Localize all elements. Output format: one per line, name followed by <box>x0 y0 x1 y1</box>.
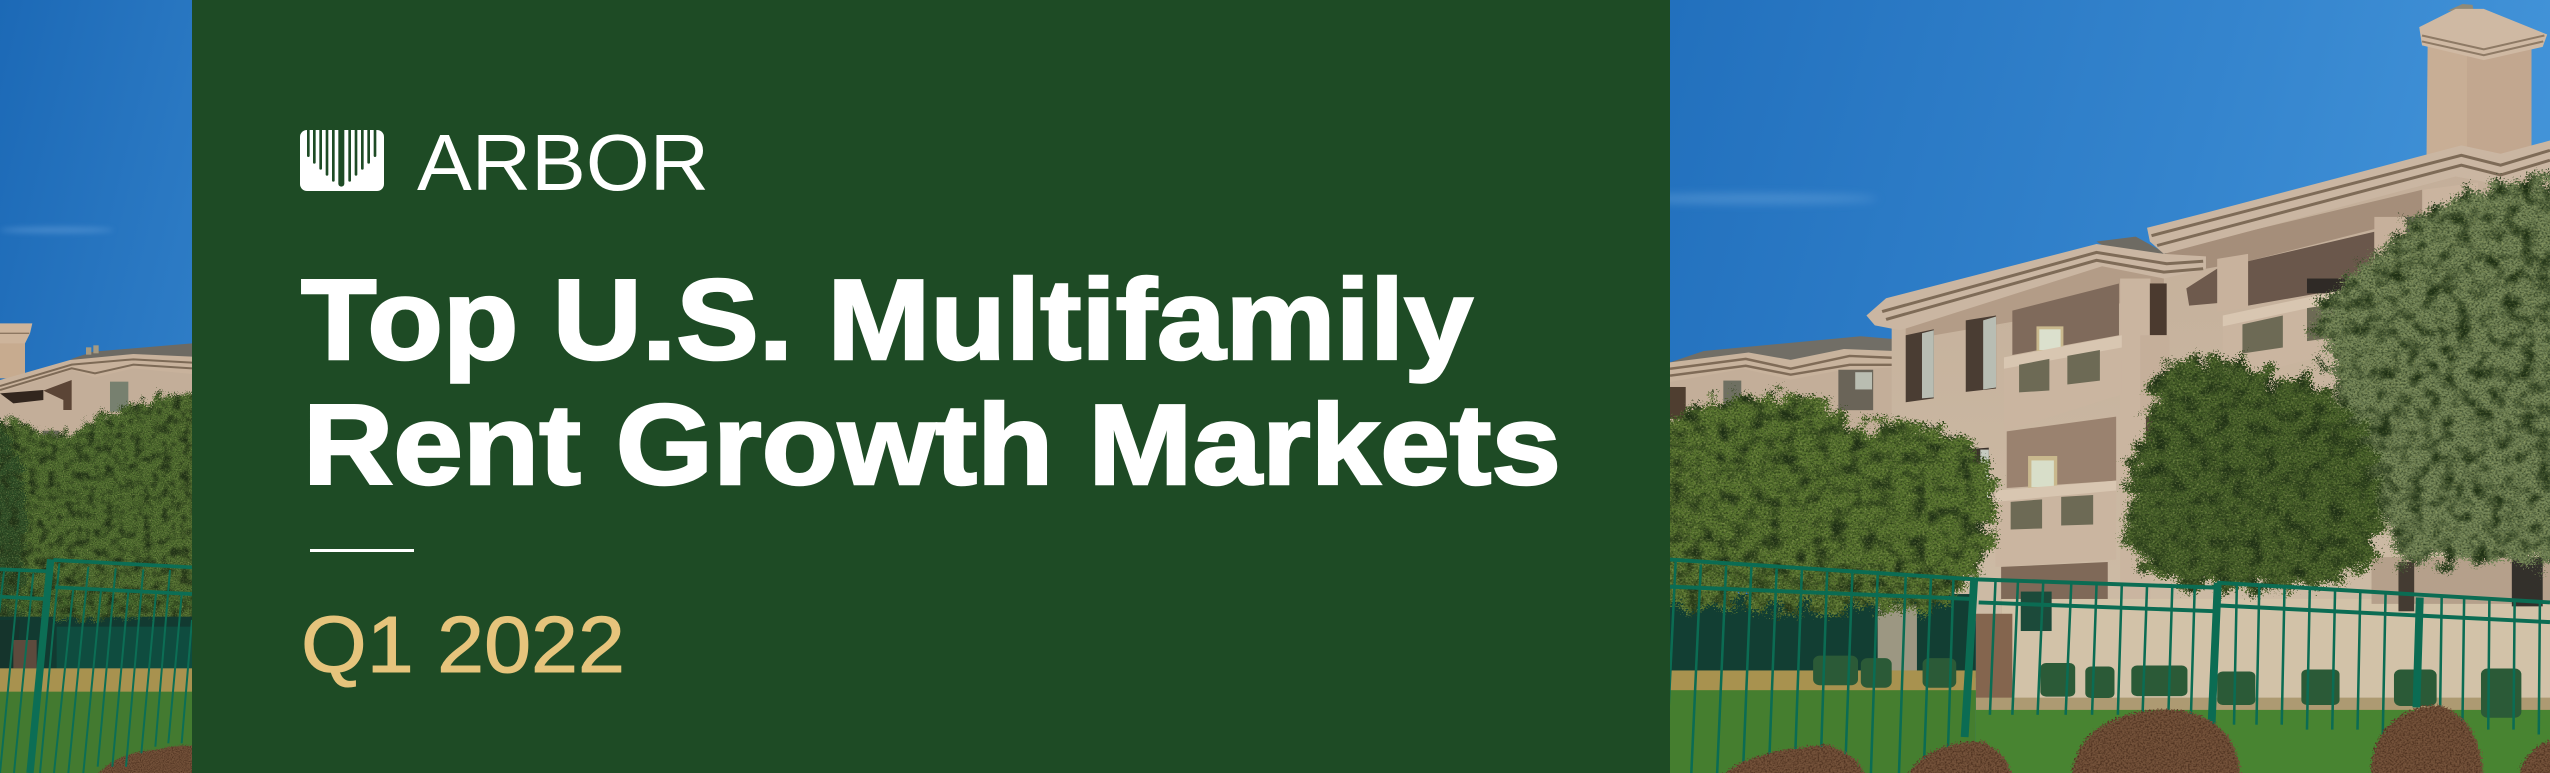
icon: Arbor tree mark <box>300 128 384 191</box>
heading: report title <box>301 257 1561 509</box>
ground floor, lawn and hedges <box>1670 557 2550 773</box>
tree, left strip <box>0 387 192 617</box>
windows <box>1906 316 2064 498</box>
photo: apartment building, right side <box>1619 0 2550 773</box>
heading: report title: Top U.S. Multifamily <box>301 257 1473 384</box>
trees, right side <box>1636 173 2550 609</box>
iron fence, right side <box>1666 560 2550 773</box>
roof bands <box>1866 140 2550 330</box>
wordmark: ARBOR: ARBOR <box>417 118 709 207</box>
panel: green title block <box>193 0 1670 773</box>
balcony recesses and pillars <box>1906 190 2422 614</box>
fence, left strip <box>0 559 192 773</box>
main building wall <box>1892 158 2550 621</box>
bush, left strip <box>93 746 200 773</box>
bushes, right side <box>1715 705 2550 773</box>
divider line <box>310 549 414 552</box>
chimney <box>2419 4 2547 158</box>
balconies with lattice panels <box>1996 290 2341 530</box>
logo: Arbor mark and wordmark <box>300 118 709 207</box>
photo: apartment building, left strip <box>0 0 192 773</box>
far building <box>1670 336 1892 440</box>
heading: report title: Rent Growth Markets <box>303 382 1561 509</box>
subheading: period: Q1 2022 <box>301 600 625 689</box>
